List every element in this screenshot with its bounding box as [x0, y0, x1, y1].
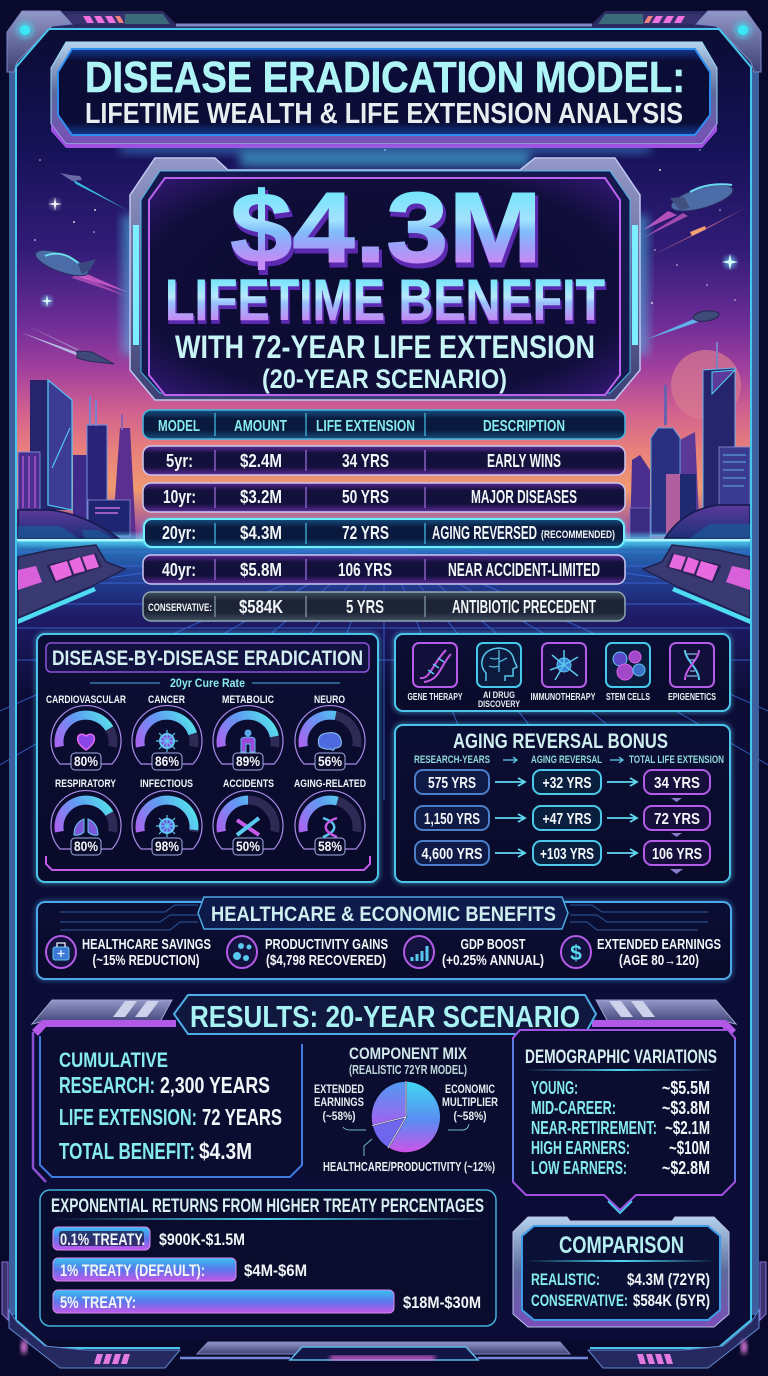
row: conservative: $584K — [239, 597, 283, 617]
icon: ai drug discovery: AI DRUG — [483, 690, 515, 701]
hero label: LIFETIME BENEFIT — [165, 268, 605, 333]
pie label: healthcare and productivity — [323, 1139, 495, 1174]
panel heading: AGING REVERSAL BONUS — [453, 730, 668, 753]
benefit: gdp boost — [404, 936, 544, 969]
row: conservative: CONSERVATIVE: — [531, 1291, 628, 1310]
hero scenario note: (20-YEAR SCENARIO) — [262, 364, 507, 394]
flow row: 575 years: +32 YRS — [542, 775, 592, 792]
benefit: gdp boost: (+0.25% ANNUAL) — [442, 952, 544, 969]
gauge: respiratory — [51, 778, 121, 855]
row: conservative: CONSERVATIVE: — [148, 602, 212, 614]
results left panel: LIFE EXTENSION: — [59, 1104, 197, 1130]
flow row: 4,600 years: 4,600 YRS — [422, 846, 483, 863]
column headings: RESEARCH-YEARS — [414, 754, 490, 766]
results left panel: 2,300 YEARS — [160, 1072, 270, 1098]
row: 20yr recommended — [143, 519, 625, 547]
row: 10yr — [143, 483, 625, 512]
row: 10yr: $3.2M — [240, 487, 282, 507]
row: high earners: HIGH EARNERS: — [531, 1138, 630, 1158]
icon: immunotherapy — [530, 643, 596, 703]
gauge: accidents — [213, 778, 283, 855]
icon: stem cells — [606, 643, 650, 703]
results left panel: $4.3M — [199, 1138, 252, 1164]
bar: 0.1% treaty: 0.1% TREATY. — [60, 1230, 145, 1249]
pie label: economic multiplier: (~58%) — [454, 1109, 486, 1123]
results left panel: TOTAL BENEFIT: — [59, 1138, 195, 1164]
panel: disease-by-disease eradication — [37, 634, 378, 882]
bar: 5% treaty: 5% TREATY: — [60, 1293, 136, 1312]
row: mid-career: ~$3.8M — [662, 1098, 710, 1118]
column headings: AGING REVERSAL — [531, 754, 602, 766]
row: 10yr: 10yr: — [163, 487, 196, 507]
pie label: extended earnings — [314, 1082, 366, 1130]
title line 2: LIFETIME WEALTH & LIFE EXTENSION ANALYSIS — [85, 98, 683, 130]
gauge: infectious — [132, 778, 202, 855]
panel: comparison — [513, 1217, 729, 1327]
icon: epigenetics: EPIGENETICS — [668, 692, 716, 703]
pie label: economic multiplier: ECONOMIC — [445, 1082, 495, 1096]
title panel — [51, 42, 717, 153]
icon: stem cells: STEM CELLS — [606, 692, 650, 703]
hero amount: $4.3M — [232, 176, 544, 288]
benefit: healthcare savings — [46, 936, 211, 969]
bar: 1% treaty: 1% TREATY (DEFAULT): — [60, 1261, 205, 1280]
hero subtitle: WITH 72-YEAR LIFE EXTENSION — [175, 329, 595, 365]
table header: AMOUNT — [234, 418, 287, 435]
row: 20yr recommended: $4.3M — [240, 523, 282, 543]
icon: ai drug discovery: DISCOVERY — [478, 699, 520, 710]
row: mid-career: MID-CAREER: — [531, 1098, 616, 1118]
row: 20yr recommended: 20yr: — [162, 523, 196, 543]
pie label: extended earnings: (~58%) — [322, 1109, 356, 1123]
results left panel: CUMULATIVE — [59, 1049, 168, 1072]
icon: immunotherapy: IMMUNOTHERAPY — [530, 692, 596, 703]
benefit: extended earnings: (AGE 80→120) — [619, 952, 699, 969]
row: 5yr: $2.4M — [240, 451, 282, 471]
table header — [143, 410, 625, 439]
row: conservative: ANTIBIOTIC PRECEDENT — [452, 597, 596, 617]
icon: gene therapy: GENE THERAPY — [408, 692, 463, 703]
flow row: 4,600 years: 106 YRS — [652, 846, 702, 863]
row: conservative: $584K (5YR) — [633, 1291, 710, 1310]
bar: 0.1% treaty: $900K-$1.5M — [159, 1230, 245, 1249]
horizon glow — [17, 534, 751, 546]
gauge: respiratory: RESPIRATORY — [55, 778, 117, 790]
panel heading: DISEASE-BY-DISEASE ERADICATION — [52, 647, 363, 670]
row: near-retirement: ~$2.1M — [665, 1118, 710, 1138]
vehicle: left — [18, 510, 125, 624]
icon: ai drug discovery — [477, 643, 521, 710]
panel: results 20-year scenario — [32, 995, 736, 1182]
benefit: healthcare savings: HEALTHCARE SAVINGS — [82, 936, 211, 953]
gauge: metabolic: 89% — [236, 753, 260, 769]
benefit: productivity gains: PRODUCTIVITY GAINS — [265, 936, 388, 953]
city skyline — [18, 342, 750, 540]
row: realistic: $4.3M (72YR) — [627, 1270, 710, 1289]
gauge: respiratory: 80% — [74, 838, 98, 854]
gauge: cancer: CANCER — [148, 694, 185, 706]
row: 5yr: 34 YRS — [342, 451, 389, 471]
panel: aging reversal bonus — [395, 725, 730, 882]
gauge: infectious: INFECTIOUS — [140, 778, 193, 790]
flow row: 575 years — [415, 770, 710, 802]
flow row: 4,600 years: +103 YRS — [540, 846, 594, 863]
row: high earners: ~$10M — [669, 1138, 710, 1158]
hero amount: $4.3M — [230, 172, 542, 284]
column headings: TOTAL LIFE EXTENSION — [629, 754, 724, 766]
flow row: 1,150 years — [415, 806, 710, 837]
table header: MODEL — [158, 418, 200, 435]
spaceships — [20, 173, 747, 364]
table header: DESCRIPTION — [483, 418, 565, 435]
results left panel: 72 YEARS — [202, 1104, 282, 1130]
row: 40yr: 40yr: — [162, 560, 196, 580]
row: 5yr — [143, 446, 625, 475]
pie label: extended earnings: EXTENDED — [314, 1082, 364, 1096]
pie label: economic multiplier: MULTIPLIER — [442, 1095, 498, 1109]
row: 40yr: NEAR ACCIDENT-LIMITED — [448, 560, 600, 580]
results left panel: RESEARCH: — [59, 1072, 155, 1098]
panel heading: HEALTHCARE & ECONOMIC BENEFITS — [211, 903, 556, 926]
row: 20yr recommended: AGING REVERSED — [432, 523, 537, 543]
gauge: metabolic — [213, 694, 283, 770]
gauge: accidents: 50% — [236, 838, 260, 854]
bar: 5% treaty: $18M-$30M — [403, 1293, 481, 1312]
gauge: aging-related — [294, 778, 366, 855]
flow row: 575 years: 34 YRS — [654, 775, 700, 792]
benefit: extended earnings: $ — [570, 942, 582, 965]
gauge: aging-related: 58% — [318, 838, 342, 854]
title line 1: DISEASE ERADICATION MODEL: — [85, 53, 685, 102]
row: 20yr recommended: (RECOMMENDED) — [541, 529, 615, 541]
flow row: 1,150 years: 1,150 YRS — [424, 811, 480, 828]
row: conservative: 5 YRS — [346, 597, 384, 617]
gauge: cardiovascular: CARDIOVASCULAR — [46, 694, 126, 706]
gauge: neuro: NEURO — [314, 694, 345, 706]
bar: 1% treaty — [53, 1258, 307, 1281]
bar: 1% treaty: $4M-$6M — [244, 1261, 307, 1280]
flow row: 1,150 years: 72 YRS — [654, 811, 700, 828]
pie label: healthcare and productivity: HEALTHCARE/PRODUCTIVITY (~12%) — [323, 1159, 495, 1174]
row: low earners: LOW EARNERS: — [531, 1158, 627, 1178]
flow row: 4,600 years — [415, 841, 710, 874]
row: low earners: ~$2.8M — [662, 1158, 710, 1178]
benefit: extended earnings — [561, 936, 721, 969]
benefit: productivity gains — [227, 936, 388, 969]
subheading: cure rate: 20yr Cure Rate — [170, 676, 245, 690]
gauge: cardiovascular: 80% — [74, 753, 98, 769]
pie label: extended earnings: EARNINGS — [314, 1095, 364, 1109]
perspective grid floor — [0, 540, 768, 800]
row: near-retirement: NEAR-RETIREMENT: — [531, 1118, 657, 1138]
results center panel: component mix: (REALISTIC 72YR MODEL) — [349, 1062, 467, 1077]
bar: 0.1% treaty — [53, 1227, 245, 1250]
gauge: metabolic: METABOLIC — [222, 694, 274, 706]
results left panel — [33, 1030, 302, 1182]
hero panel: lifetime benefit — [122, 152, 648, 400]
vehicle: right — [643, 505, 750, 624]
row: 40yr: $5.8M — [240, 560, 282, 580]
column headings — [414, 754, 724, 766]
row: 40yr: 106 YRS — [338, 560, 392, 580]
row: young: ~$5.5M — [662, 1078, 710, 1098]
benefit: productivity gains: ($4,798 RECOVERED) — [266, 952, 386, 969]
panel heading: COMPARISON — [559, 1232, 684, 1259]
row: young: YOUNG: — [531, 1078, 578, 1098]
gauge: aging-related: AGING-RELATED — [294, 778, 366, 790]
panel: research technologies — [395, 634, 730, 711]
benefit: extended earnings: EXTENDED EARNINGS — [597, 936, 721, 953]
bar: 5% treaty — [53, 1290, 481, 1313]
row: realistic: REALISTIC: — [531, 1270, 600, 1289]
gauge: cardiovascular — [46, 694, 126, 770]
gauge: cancer — [132, 694, 202, 770]
row: 40yr — [143, 555, 625, 584]
hero label: LIFETIME BENEFIT — [166, 271, 606, 336]
results title plate: RESULTS: 20-YEAR SCENARIO — [190, 999, 580, 1034]
panel: healthcare and economic benefits — [37, 897, 731, 979]
flow row: 1,150 years: +47 YRS — [542, 811, 592, 828]
panel: exponential returns — [40, 1190, 496, 1326]
benefit: healthcare savings: (~15% REDUCTION) — [92, 952, 200, 969]
icon: gene therapy — [408, 643, 463, 703]
row: 10yr: 50 YRS — [342, 487, 389, 507]
row: 20yr recommended: 72 YRS — [342, 523, 389, 543]
row: young — [531, 1078, 710, 1098]
row: mid-career — [531, 1098, 710, 1118]
pie chart — [371, 1081, 441, 1153]
flow row: 575 years: 575 YRS — [428, 775, 476, 792]
benefit: gdp boost: GDP BOOST — [460, 936, 526, 953]
panel: demographic variations — [513, 1030, 735, 1213]
results center panel: component mix: COMPONENT MIX — [349, 1044, 468, 1063]
row: 5yr: EARLY WINS — [487, 451, 561, 471]
gauge: accidents: ACCIDENTS — [223, 778, 274, 790]
gauge: cancer: 86% — [155, 753, 179, 769]
row: conservative — [143, 592, 625, 621]
row: realistic — [531, 1270, 710, 1289]
results center panel: component mix — [304, 1032, 512, 1177]
table: model comparison — [143, 410, 625, 621]
icon: epigenetics — [668, 643, 716, 703]
row: 5yr: 5yr: — [166, 451, 193, 471]
gauge: neuro — [295, 694, 365, 770]
table header: LIFE EXTENSION — [316, 418, 415, 435]
decorative metal brackets — [32, 1000, 736, 1036]
panel heading: EXPONENTIAL RETURNS FROM HIGHER TREATY PERCENTAGES — [51, 1196, 484, 1217]
row: 10yr: MAJOR DISEASES — [471, 487, 577, 507]
pie label: economic multiplier — [442, 1082, 498, 1130]
gauge: neuro: 56% — [318, 753, 342, 769]
gauge: infectious: 98% — [155, 838, 179, 854]
